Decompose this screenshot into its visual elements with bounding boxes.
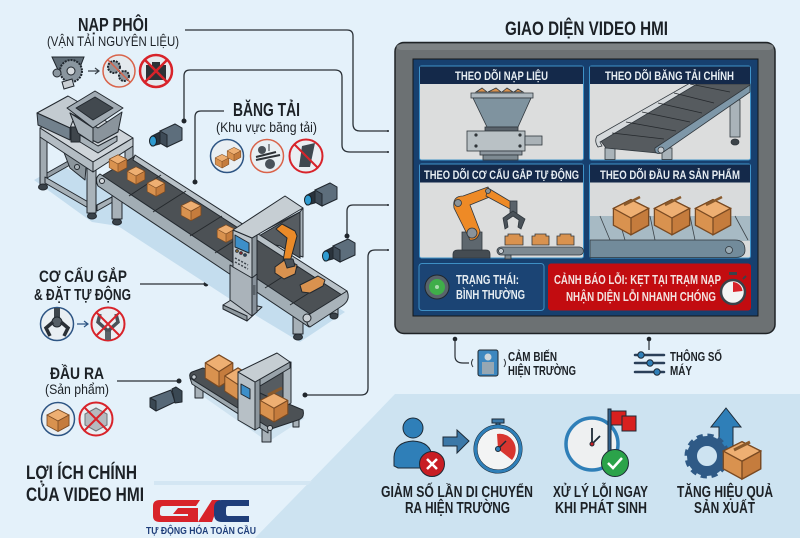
logo: GAC <box>146 500 256 537</box>
error alert panel <box>548 264 751 310</box>
icon: person, arrow, stopwatch <box>394 418 520 476</box>
benefit: immediate fault handling: XỬ LÝ LỖI NGAY <box>553 483 648 501</box>
connector: gripper label <box>140 283 206 285</box>
heading: feeding: NẠP PHÔI <box>78 14 148 35</box>
status panel: TRẠNG THÁI: <box>456 272 519 287</box>
field sensor item: CẢM BIẾN <box>508 349 557 364</box>
panel: gripper monitoring <box>420 164 584 259</box>
panel: output monitoring <box>590 164 750 258</box>
robot arm in gantry <box>275 224 297 279</box>
icons: conveyor <box>210 140 322 172</box>
field sensor item: HIỆN TRƯỜNG <box>508 363 576 378</box>
title: HMI: GIAO DIỆN VIDEO HMI <box>505 18 668 40</box>
connector: output to HMI <box>305 250 388 395</box>
connector: conveyor label <box>195 111 224 182</box>
heading: gripper: CƠ CẤU GẮP <box>39 267 127 286</box>
connector: output label <box>117 380 179 382</box>
heading: feeding <box>47 14 179 49</box>
benefits background panel <box>255 394 800 538</box>
icons: feeding <box>52 55 172 89</box>
heading: gripper <box>34 267 131 304</box>
connector: camera 3 to HMI <box>347 205 388 236</box>
benefit: improve production efficiency <box>677 408 773 517</box>
separator strip <box>154 481 312 485</box>
heading: key benefits <box>26 462 144 506</box>
logo: GAC: TỰ ĐỘNG HÓA TOÀN CẦU <box>146 524 256 537</box>
heading: conveyor <box>216 99 317 135</box>
feeding machine <box>37 91 133 219</box>
connector dots <box>176 118 389 398</box>
camera 4 <box>150 387 182 411</box>
camera 1 <box>150 124 182 147</box>
connector: camera 1 to HMI <box>184 70 388 152</box>
panel: conveyor monitoring: THEO DÕI BĂNG TẢI CHÍNH <box>605 68 734 83</box>
panel: output monitoring: THEO DÕI ĐẦU RA SẢN PHẨM <box>600 167 740 182</box>
benefit: fewer site trips <box>381 418 533 517</box>
main conveyor <box>96 155 348 340</box>
HMI monitor <box>395 42 775 334</box>
benefit: fewer site trips: GIẢM SỐ LẦN DI CHUYỂN <box>381 483 533 501</box>
heading: conveyor: BĂNG TẢI <box>233 99 300 120</box>
icons: output <box>42 402 112 436</box>
benefit: fewer site trips: RA HIỆN TRƯỜNG <box>405 499 510 517</box>
gantry and control cabinet <box>223 196 303 321</box>
icon: stopwatch <box>721 272 746 304</box>
output conveyor with gate <box>190 353 305 442</box>
heading: output: (Sản phẩm) <box>45 381 109 397</box>
heading: key benefits: CỦA VIDEO HMI <box>26 484 144 506</box>
heading: output: ĐẦU RA <box>50 364 104 383</box>
status panel <box>419 264 544 310</box>
panel: conveyor monitoring <box>590 66 750 160</box>
icon: clock, flag, check <box>566 409 636 476</box>
benefit: improve production efficiency: SẢN XUẤT <box>694 500 755 517</box>
error alert panel: CẢNH BÁO LỖI: KẸT TẠI TRẠM NẠP <box>554 272 721 287</box>
machine parameters item <box>635 337 722 378</box>
connector: feeding to HMI <box>185 30 388 131</box>
icons: gripper <box>40 308 124 340</box>
heading: key benefits: LỢI ÍCH CHÍNH <box>26 462 137 484</box>
icon: arrow, gear, box <box>687 408 761 479</box>
heading: output <box>45 364 109 397</box>
field sensor item <box>453 337 576 378</box>
heading: conveyor: (Khu vực băng tải) <box>216 119 317 135</box>
panel: feed monitoring: THEO DÕI NẠP LIỆU <box>455 68 548 83</box>
machine parameters item: THÔNG SỐ <box>670 349 722 364</box>
status panel: BÌNH THƯỜNG <box>456 287 525 302</box>
benefit: immediate fault handling: KHI PHÁT SINH <box>555 500 647 517</box>
camera 3 <box>322 239 355 262</box>
machine parameters item: MÁY <box>670 363 693 378</box>
benefit: immediate fault handling <box>553 409 648 517</box>
floor shadows <box>34 165 345 342</box>
error alert panel: NHẬN DIỆN LỖI NHANH CHÓNG <box>566 289 716 304</box>
gantry rear wall <box>252 212 300 258</box>
panel: feed monitoring <box>420 66 584 160</box>
heading: feeding: (VẬN TẢI NGUYÊN LIỆU) <box>47 33 179 49</box>
heading: gripper: & ĐẶT TỰ ĐỘNG <box>34 285 131 304</box>
benefit: improve production efficiency: TĂNG HIỆU QUẢ <box>677 483 773 501</box>
panel: gripper monitoring: THEO DÕI CƠ CẤU GẮP TỰ ĐỘNG <box>424 167 579 182</box>
camera 2 <box>304 183 337 206</box>
